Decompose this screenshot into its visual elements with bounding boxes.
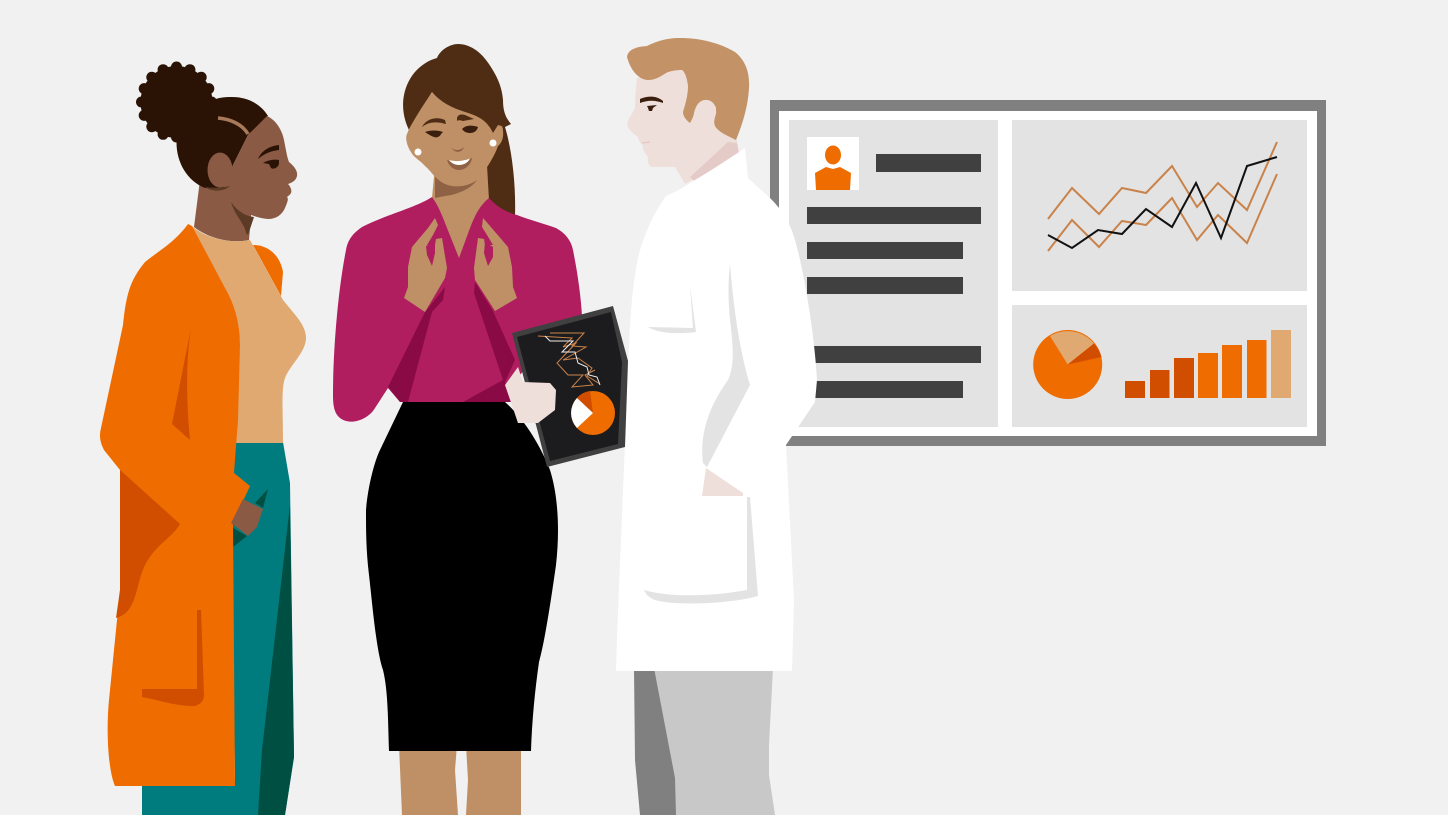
coat fold xyxy=(172,328,191,440)
figure: woman in orange coat xyxy=(100,62,306,815)
neck xyxy=(194,180,254,241)
panel: dashboard board xyxy=(770,100,1326,446)
coat pocket xyxy=(142,610,204,706)
blouse shade xyxy=(388,282,515,402)
orange coat xyxy=(100,224,250,786)
text placeholder bars xyxy=(807,154,981,398)
coat back panel xyxy=(253,245,283,296)
face xyxy=(222,116,297,219)
tablet line chart xyxy=(538,333,600,387)
earrings xyxy=(414,140,496,156)
eyebrow and eye xyxy=(258,145,279,169)
legs xyxy=(399,745,521,815)
tablet held by the man xyxy=(505,306,628,467)
figure: man in white lab coat xyxy=(616,38,817,815)
neck shadow xyxy=(231,202,254,235)
trousers xyxy=(634,668,775,815)
sleeve fold xyxy=(702,264,750,467)
ear xyxy=(208,152,232,188)
hair back of head xyxy=(177,97,268,188)
hand in pocket xyxy=(231,499,263,536)
black skirt xyxy=(366,402,558,751)
coat sleeve shade xyxy=(116,470,180,618)
lower pocket xyxy=(644,497,758,603)
left hand xyxy=(404,218,447,312)
hand holding tablet xyxy=(505,367,556,423)
beige top xyxy=(192,226,306,443)
mouth xyxy=(642,142,650,143)
face and neck xyxy=(627,68,739,184)
eyes xyxy=(425,126,478,137)
tablet pie chart xyxy=(571,391,615,435)
hair bun xyxy=(136,62,217,142)
magenta blouse xyxy=(333,197,582,422)
ear and face xyxy=(406,92,503,186)
chest pocket xyxy=(648,285,696,333)
pie chart xyxy=(1033,330,1102,399)
tablet screen xyxy=(517,312,622,461)
hair parting xyxy=(218,118,248,134)
neck shadow xyxy=(690,142,739,181)
neck and chest xyxy=(432,165,489,262)
tablet frame xyxy=(512,306,628,467)
long hair xyxy=(403,44,515,215)
eyebrow and eye xyxy=(640,97,663,111)
right hand xyxy=(474,218,517,311)
hand peeking from pocket xyxy=(702,468,743,496)
ear xyxy=(694,100,716,130)
bar chart xyxy=(1125,330,1291,398)
figure: woman in magenta blouse xyxy=(333,44,582,815)
smile xyxy=(447,158,472,170)
nose xyxy=(451,147,464,152)
teal trousers xyxy=(142,442,294,815)
icon: profile picture xyxy=(807,137,859,190)
eyebrows xyxy=(422,114,474,127)
white lab coat xyxy=(616,148,817,671)
hair over forehead xyxy=(432,75,505,133)
line chart xyxy=(1048,142,1277,251)
neck shadow xyxy=(435,176,477,198)
hair xyxy=(627,38,749,140)
